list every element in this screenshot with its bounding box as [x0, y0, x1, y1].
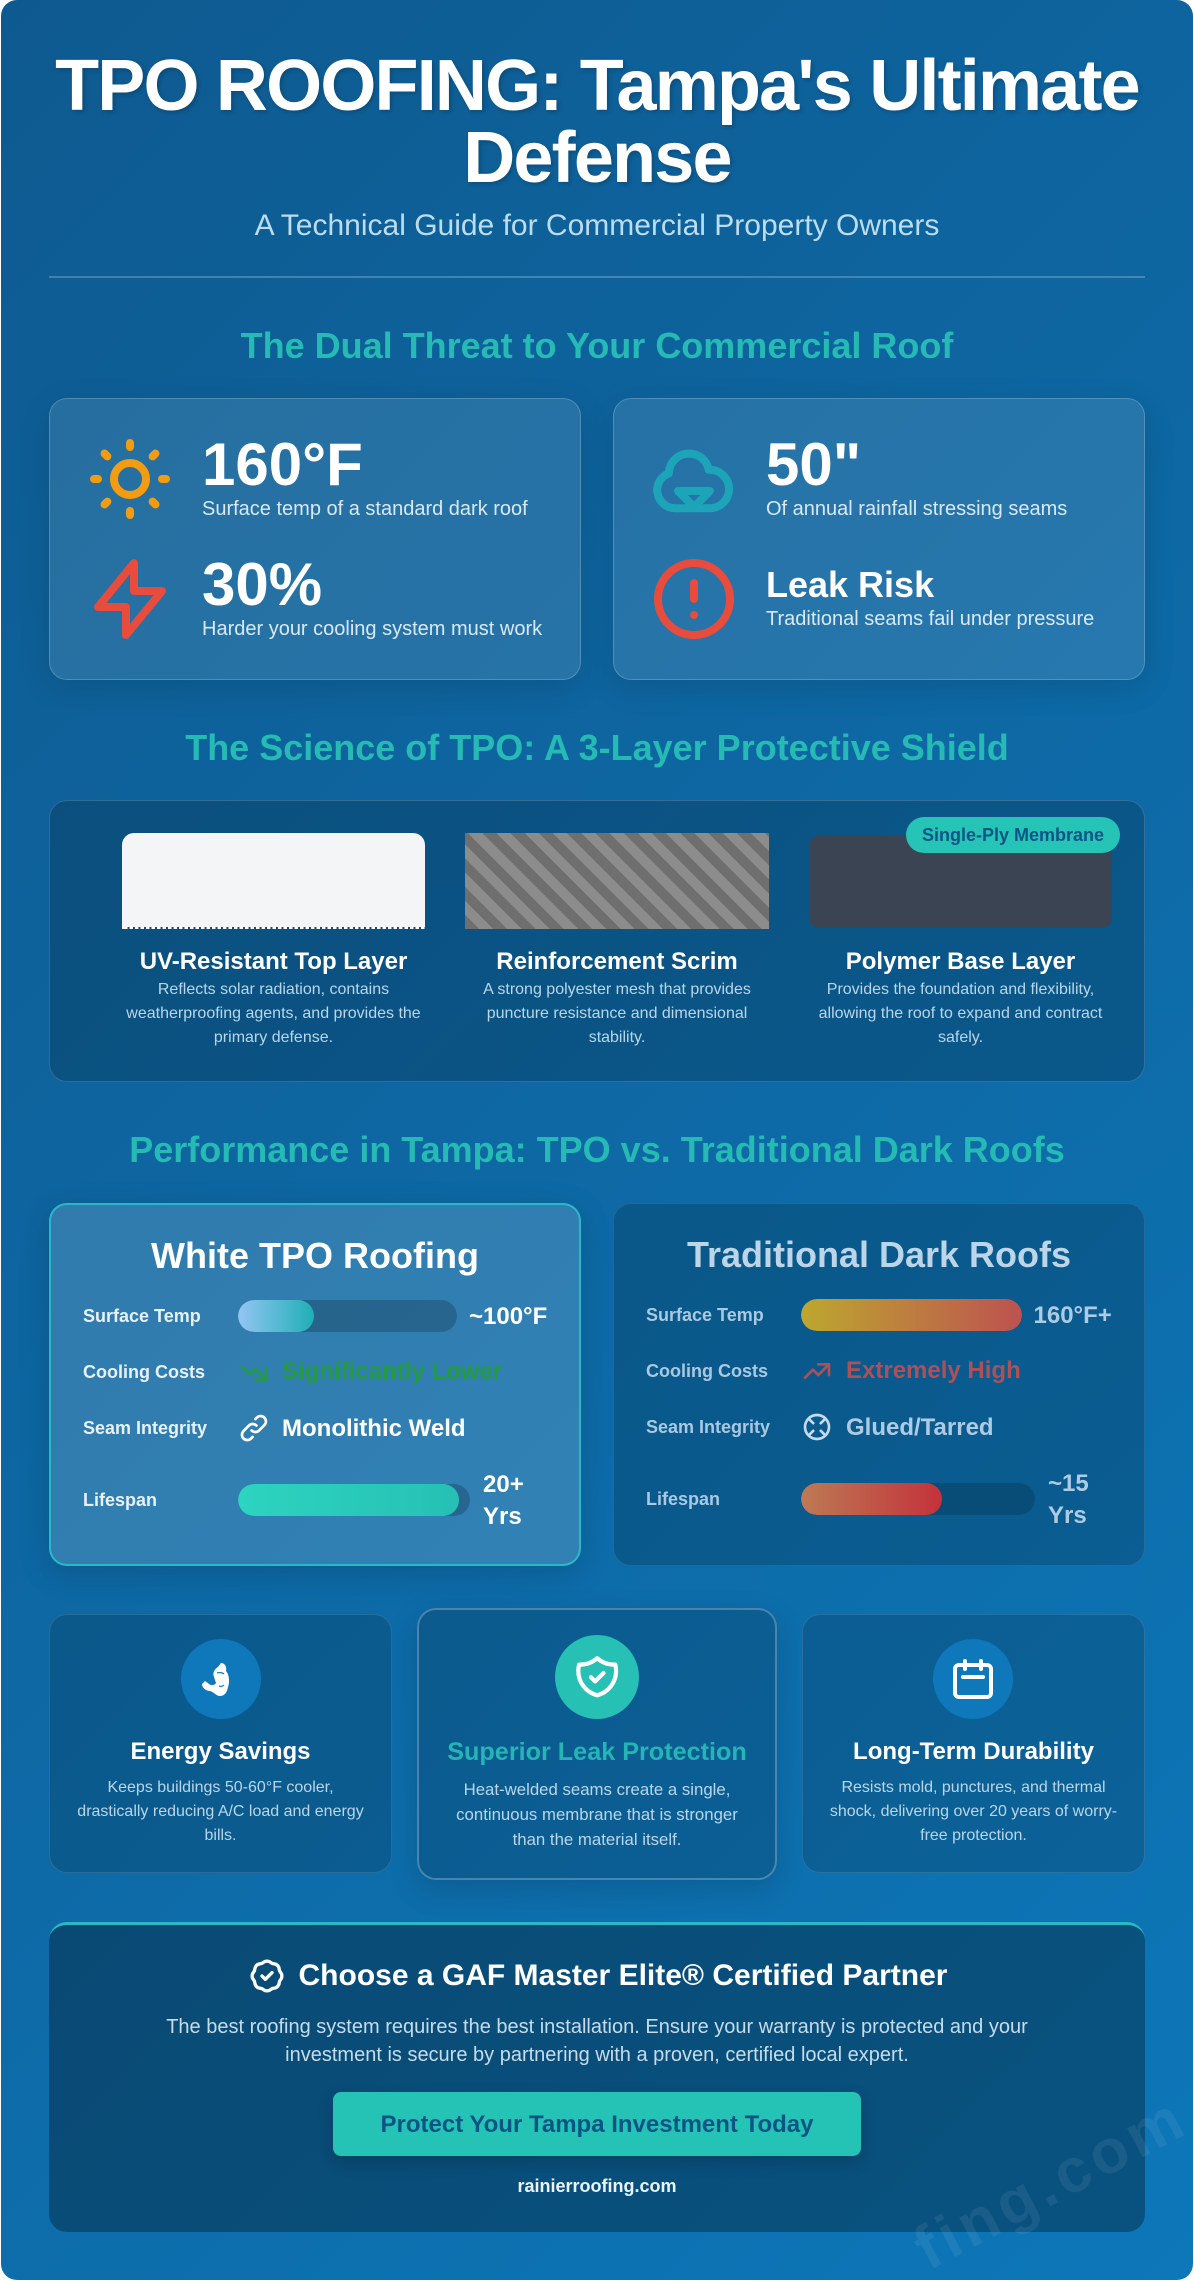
card description: Resists mold, punctures, and thermal — [841, 1778, 1106, 1796]
icon: lightning bolt — [94, 559, 166, 639]
icon: trending down — [240, 1364, 268, 1382]
swatch: striped scrim — [465, 833, 769, 929]
CTA text: investment is secure by partnering with a proven, certified local expert. — [285, 2044, 909, 2066]
layer description: Provides the foundation and flexibility, — [827, 980, 1094, 998]
stat: 160F: 160°F — [202, 431, 363, 498]
icon: calendar — [933, 1639, 1013, 1719]
card description: Heat-welded seams create a single, — [464, 1780, 730, 1799]
panel: energy savings — [49, 1614, 392, 1873]
swatch: white membrane — [122, 833, 425, 929]
layer: UV top layer — [122, 833, 425, 1046]
label: lifespan: Lifespan — [83, 1490, 157, 1510]
badge: single-ply membrane: Single-Ply Membrane — [922, 825, 1104, 845]
CTA button — [333, 2092, 861, 2156]
stat description: Surface temp of a standard dark roof — [202, 498, 528, 520]
layer: reinforcement scrim — [465, 833, 769, 1046]
stat: 50 inches: 50" — [766, 431, 861, 498]
layer description — [819, 982, 1102, 1046]
card description: drastically reducing A/C load and energy — [77, 1802, 364, 1820]
label: surface temp: Surface Temp — [646, 1305, 764, 1325]
title — [56, 58, 1142, 186]
icon: link — [240, 1414, 268, 1442]
card description: than the material itself. — [513, 1830, 681, 1849]
icon: shield check — [555, 1635, 639, 1719]
layer description: primary defense. — [214, 1028, 333, 1046]
value: lifespan: 20+ — [483, 1471, 524, 1498]
layer description: Reflects solar radiation, contains — [158, 980, 389, 998]
title: Defense — [463, 118, 731, 198]
card description — [78, 1780, 364, 1840]
title: TPO ROOFING: Tampa's Ultimate — [55, 46, 1139, 126]
card title: Long-Term Durability — [853, 1738, 1094, 1765]
card description: shock, delivering over 20 years of worry- — [830, 1802, 1117, 1820]
stat: leak risk: Leak Risk — [766, 564, 934, 604]
bar: lifespan — [238, 1484, 470, 1516]
card description: continuous membrane that is stronger — [456, 1805, 738, 1824]
panel: three layers — [49, 800, 1145, 1082]
value: seam integrity: Glued/Tarred — [846, 1414, 994, 1441]
layer title: Reinforcement Scrim — [496, 948, 738, 975]
heading: dual threat: The Dual Threat to Your Commercial Roof — [241, 325, 953, 366]
layer description: puncture resistance and dimensional — [487, 1004, 747, 1022]
panel: rain threats — [613, 398, 1145, 680]
value: surface temp: ~100°F — [469, 1303, 547, 1330]
label: cooling costs: Cooling Costs — [646, 1361, 768, 1381]
card title: White TPO Roofing — [151, 1234, 479, 1276]
panel: traditional dark roofs comparison — [613, 1203, 1145, 1566]
panel: superior leak protection — [417, 1608, 777, 1880]
label: lifespan: Lifespan — [646, 1489, 720, 1509]
heading: science of TPO: The Science of TPO: A 3-Layer Protective Shield — [185, 727, 1009, 768]
icon: exclamation circle — [654, 559, 734, 639]
label: seam integrity: Seam Integrity — [83, 1418, 207, 1438]
card description — [830, 1780, 1116, 1844]
layer: polymer base — [809, 817, 1120, 1046]
subtitle: A Technical Guide for Commercial Property Owners — [255, 209, 939, 242]
bar: surface temp — [801, 1299, 1022, 1331]
bar: lifespan — [801, 1483, 1034, 1515]
card title: Traditional Dark Roofs — [687, 1234, 1071, 1274]
CTA text: The best roofing system requires the best installation. Ensure your warranty is protected and your — [166, 2016, 1028, 2038]
icon: rain cloud — [653, 450, 733, 512]
layer description — [126, 982, 420, 1046]
value: surface temp: 160°F+ — [1034, 1302, 1112, 1329]
layer description: stability. — [589, 1028, 645, 1046]
card description: bills. — [204, 1826, 236, 1844]
layer description: weatherproofing agents, and provides the — [126, 1004, 421, 1022]
layer description — [483, 982, 750, 1046]
panel: long-term durability — [802, 1614, 1145, 1873]
CTA text — [166, 2018, 1028, 2065]
CTA heading: Choose a GAF Master Elite® Certified Partner — [298, 1959, 947, 1992]
card description — [456, 1783, 738, 1845]
label: surface temp: Surface Temp — [83, 1306, 201, 1326]
value: lifespan: ~15 — [1048, 1470, 1089, 1497]
stat description: Of annual rainfall stressing seams — [766, 498, 1067, 520]
card description: free protection. — [920, 1826, 1027, 1844]
label: cooling costs: Cooling Costs — [83, 1362, 205, 1382]
value: lifespan: Yrs — [483, 1503, 522, 1530]
panel: heat threats — [49, 398, 581, 680]
value: lifespan: Yrs — [1048, 1502, 1087, 1529]
badge: single-ply membrane — [906, 817, 1120, 853]
icon: trending up — [804, 1362, 830, 1380]
value: lifespan — [484, 1475, 523, 1524]
icon: badge check — [250, 1960, 284, 1992]
card description: Keeps buildings 50-60°F cooler, — [107, 1778, 334, 1796]
layer description: allowing the roof to expand and contract — [819, 1004, 1102, 1022]
website: rainierroofing.com — [517, 2176, 677, 2196]
stat: 30 percent: 30% — [202, 551, 322, 618]
value: cooling costs: Significantly Lower — [282, 1358, 502, 1385]
label: seam integrity: Seam Integrity — [646, 1417, 770, 1437]
value: cooling costs: Extremely High — [846, 1357, 1021, 1384]
panel: white TPO comparison — [49, 1203, 581, 1566]
CTA button: Protect Your Tampa Investment Today — [380, 2111, 813, 2138]
value: seam integrity: Monolithic Weld — [282, 1415, 466, 1442]
icon: energy badge — [181, 1639, 261, 1719]
layer description: A strong polyester mesh that provides — [483, 980, 751, 998]
layer title: UV-Resistant Top Layer — [140, 948, 407, 975]
layer description: safely. — [938, 1028, 983, 1046]
layer title: Polymer Base Layer — [846, 948, 1075, 975]
bar: surface temp — [238, 1300, 457, 1332]
swatch: dark base — [809, 836, 1112, 928]
icon: support ring — [804, 1414, 830, 1440]
panel: call to action — [49, 1922, 1145, 2232]
heading: performance: Performance in Tampa: TPO vs. Traditional Dark Roofs — [129, 1129, 1065, 1170]
value: lifespan — [1048, 1474, 1088, 1523]
card title: Superior Leak Protection — [447, 1738, 747, 1766]
card title: Energy Savings — [130, 1738, 311, 1765]
icon: sun — [90, 439, 170, 519]
stat description: Traditional seams fail under pressure — [766, 608, 1094, 630]
stat description: Harder your cooling system must work — [202, 618, 542, 640]
